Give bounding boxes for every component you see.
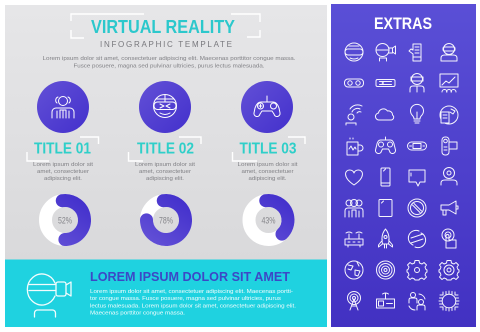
icon: person with camera [376,44,396,61]
panel: extras [331,4,476,327]
panel: main background [5,5,327,260]
title 03 [232,137,305,161]
donut chart 52%: 52% [58,216,72,226]
icon: vr goggles [344,79,364,87]
icon: earth [345,261,363,279]
title bracket [71,14,260,38]
icon: router [345,232,363,247]
icon: wifi person [346,105,362,125]
icon: handheld console [408,142,426,150]
icon: webcam person [441,168,457,185]
intro text [42,56,296,70]
title 03: TITLE 03 [240,140,297,158]
donut chart 43%: 43% [262,216,276,226]
icon: vr headset person [27,274,71,317]
icon circle 3: gamepad [241,81,293,133]
extras heading: EXTRAS [374,15,432,33]
icon: gamepad [375,137,396,154]
band heading: LOREM IPSUM DOLOR SIT AMET [90,270,290,284]
text column 3 [238,162,298,182]
icon: light bulb [410,104,424,123]
icon: presentation chart [440,74,458,92]
text column 2: amet, consectetuer [139,169,191,175]
icon: vr glove [409,44,421,61]
band text: Lorem ipsum dolor sit amet, consectetuer adipiscing elit. Maecenas portti- [90,289,293,295]
band text: Maecenas porttitor congue massa. [90,310,185,316]
text column 2: Lorem ipsum dolor sit [135,162,196,168]
icon: prohibited [408,199,426,217]
title 02: TITLE 02 [137,140,194,158]
icon: heart [346,170,362,185]
icon: megaphone [441,201,458,215]
icon circle 2: vr helmet [139,81,191,133]
icon: rotating planet [408,230,426,248]
icon: speech screen [409,170,425,186]
text column 1 [33,162,94,182]
icon: cloud [375,109,394,120]
text column 1: amet, consectetuer [37,169,89,175]
panel: bottom cyan band [5,260,327,327]
icon: mug [347,138,363,155]
icon: globe with document [440,106,458,124]
donut chart 43% [246,198,291,242]
text column 3: adipiscing elit. [248,176,286,182]
intro text: Fusce posuere, magna sed pulvinar ultricies, purus lectus malesuada. [74,64,264,70]
icon: headset band [376,80,395,86]
icon: tablet [379,200,392,216]
icon: gear [407,260,427,280]
text column 2 [135,162,196,182]
title 02 [128,137,201,161]
donut chart 52% [43,198,87,242]
subtitle: INFOGRAPHIC TEMPLATE [100,40,232,49]
icon: radio tower [348,292,360,310]
icon: rocket [378,229,392,248]
icon: person in goggles [410,74,424,92]
icon: person with visor [441,44,457,61]
donut chart 78%: 78% [159,216,173,226]
text column 2: adipiscing elit. [146,176,184,182]
icon: microchip [439,291,459,311]
icon: helmet [345,43,363,61]
text column 1: adipiscing elit. [44,176,82,182]
icon circle 1: people [37,81,89,133]
icon: gear with rings [439,260,459,280]
band text: tor congue massa. Fusce posuere, magna sed pulvinar ultricies, purus [90,296,281,302]
intro text: Lorem ipsum dolor sit amet, consectetuer adipiscing elit. Maecenas porttitor congue massa. [42,56,296,62]
icon: group of people [345,200,363,217]
icon: touch finger [442,229,456,248]
text column 3: Lorem ipsum dolor sit [238,162,298,168]
title 01 [27,137,98,161]
band text [90,289,296,316]
icon: signal device [376,293,394,308]
icon: target [376,261,394,279]
donut chart 78% [144,198,188,242]
title 01: TITLE 01 [34,140,91,158]
icon: smartphone [381,168,390,186]
icon: users exchange [409,292,425,310]
text column 1: Lorem ipsum dolor sit [33,162,94,168]
icon: video camera [442,137,457,155]
band text: lectus malesuada. Lorem ipsum dolor sit amet, consectetuer adipiscing elit. [90,304,296,310]
text column 3: amet, consectetuer [242,169,294,175]
title: VIRTUAL REALITY [91,16,236,37]
